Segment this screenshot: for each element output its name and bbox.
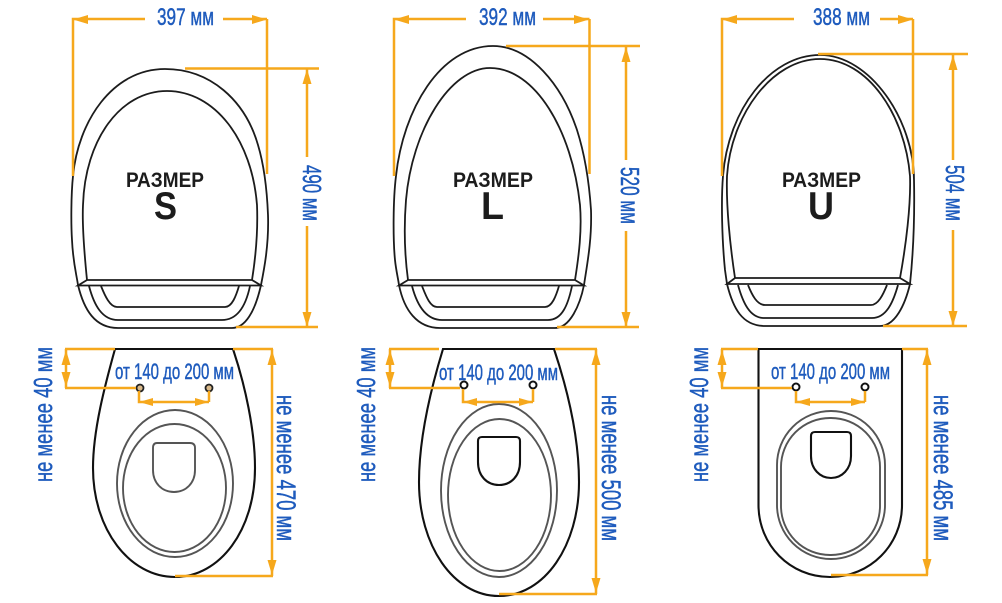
height dimension U (818, 54, 970, 326)
bolt spacing U: от 140 до 200 мм (771, 359, 890, 384)
height dimension S: 490 мм (297, 165, 327, 221)
front distance U: не менее 40 мм (684, 347, 714, 482)
front distance L (351, 347, 460, 482)
bolt spacing S: от 140 до 200 мм (115, 359, 234, 384)
seat label S: РАЗМЕР (126, 169, 204, 192)
panel: size S seat (71, 4, 327, 328)
width dimension L (394, 4, 590, 176)
bowl length L: не менее 500 мм (596, 395, 626, 541)
seat outline S (71, 69, 268, 328)
panel: size U bowl (684, 347, 958, 577)
bowl length U (831, 349, 958, 575)
bowl outline L (419, 349, 579, 596)
height dimension S (185, 68, 327, 327)
bowl length S: не менее 470 мм (271, 395, 301, 541)
width dimension U (722, 4, 913, 176)
front distance S (28, 347, 136, 482)
bolt spacing L: от 140 до 200 мм (439, 360, 558, 385)
bowl outline U (758, 349, 902, 577)
panel: size L seat (394, 4, 645, 328)
front distance L: не менее 40 мм (351, 347, 381, 482)
bowl outline S (93, 349, 255, 577)
panel: size S bowl (28, 347, 301, 577)
bolt spacing U (771, 359, 890, 406)
panel: size U seat (722, 4, 970, 326)
width dimension S: 397 мм (157, 4, 214, 31)
seat label U: U (808, 185, 834, 228)
bolt spacing S (115, 359, 234, 406)
seat label L: L (481, 185, 504, 228)
seat outline U (722, 55, 914, 326)
seat label L: РАЗМЕР (453, 169, 533, 192)
seat label U (782, 169, 861, 228)
seat outline L (394, 46, 591, 328)
bowl length U: не менее 485 мм (928, 395, 958, 541)
width dimension S (73, 4, 267, 176)
height dimension L: 520 мм (615, 167, 645, 224)
height dimension U: 504 мм (940, 165, 970, 221)
seat label S (126, 169, 204, 228)
bowl length L (499, 349, 626, 594)
seat label L (453, 169, 533, 228)
width dimension L: 392 мм (479, 4, 536, 31)
panel: size L bowl (351, 347, 626, 596)
seat label U: РАЗМЕР (782, 169, 861, 192)
seat label S: S (154, 185, 177, 228)
front distance S: не менее 40 мм (28, 347, 58, 482)
width dimension U: 388 мм (813, 4, 870, 31)
bowl length S (175, 349, 301, 576)
height dimension L (506, 46, 645, 327)
front distance U (684, 347, 792, 482)
bolt spacing L (439, 360, 558, 406)
